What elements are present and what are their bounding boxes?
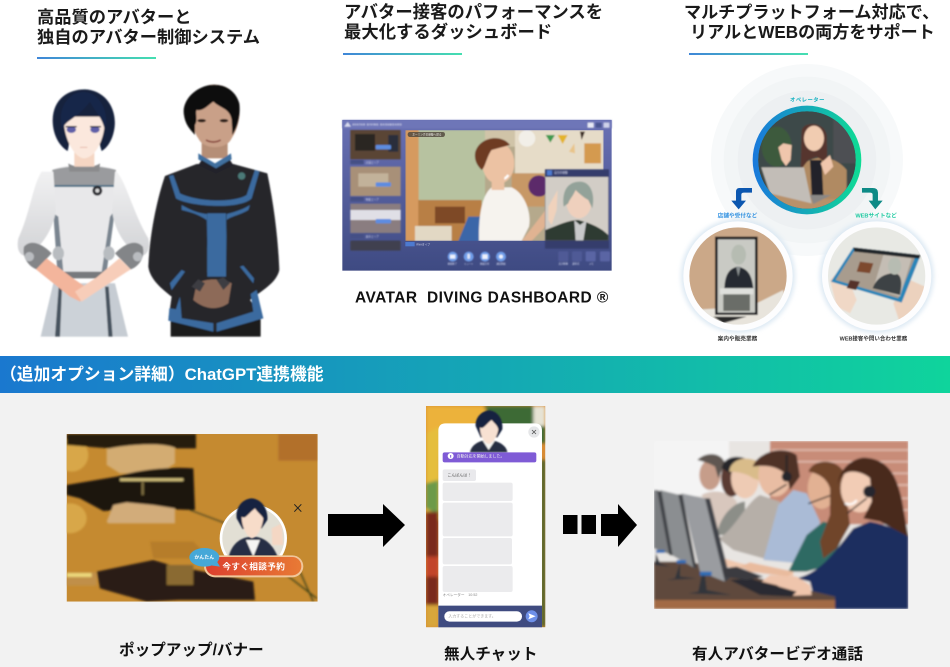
dashboard screenshot xyxy=(342,120,612,271)
dashboard screenshot: AVATAR DIVING DASHBOARD xyxy=(352,123,402,127)
label: web: WEBサイトなど xyxy=(855,212,897,220)
close icon xyxy=(294,504,301,512)
caption: staffed video call: 有人アバタービデオ通話 xyxy=(692,644,863,663)
dashboard screenshot: 画面共有 xyxy=(480,262,490,266)
illustration: realistic avatar xyxy=(148,85,279,337)
operator label: オペレーター xyxy=(790,95,825,103)
dashboard screenshot: 物販エリア xyxy=(366,198,379,202)
heading: dashboard: 最大化するダッシュボード xyxy=(344,22,552,42)
operators photo xyxy=(654,441,908,609)
chat bubbles xyxy=(443,469,513,597)
chat avatar xyxy=(470,410,507,452)
status bar xyxy=(443,452,536,462)
button: 今すぐ相談予約 xyxy=(222,561,285,572)
caption: unattended chat: 無人チャット xyxy=(444,645,537,663)
arrow: dashed xyxy=(563,504,637,547)
dashboard screenshot: 展示エリア xyxy=(366,235,379,239)
label: store: 店舗や受付など xyxy=(718,212,758,220)
chat panel: 入力することができます。 xyxy=(448,613,496,619)
web circle xyxy=(820,219,934,333)
chat panel xyxy=(438,423,542,627)
heading: dashboard: アバター接客のパフォーマンスを xyxy=(344,2,603,22)
band: option heading: （追加オプション詳細）ChatGPT連携機能 xyxy=(0,364,324,384)
dashboard screenshot: 出力映像 xyxy=(559,262,569,266)
bubble xyxy=(189,548,220,567)
concentric background circles xyxy=(711,64,903,256)
dashboard screenshot: ホーミングの映像へ戻る xyxy=(412,133,442,137)
dashboard screenshot: ミュート xyxy=(464,263,473,266)
status bar: 自動対応を開始しました。 xyxy=(457,453,504,459)
arrow: solid xyxy=(328,504,405,547)
heading: high quality avatars: 独自のアバター制御システム xyxy=(37,27,260,47)
caption: store: 案内や販売業務 xyxy=(718,334,758,342)
caption: popup banner: ポップアップ/バナー xyxy=(119,641,264,659)
heading: multi platform xyxy=(684,3,939,55)
caption: web: WEB接客や問い合わせ業務 xyxy=(840,334,908,342)
button xyxy=(204,555,303,577)
platform diagram xyxy=(681,64,934,342)
dashboard screenshot: RNAタイプ xyxy=(416,242,430,246)
chat bubbles: こんばんは！ xyxy=(447,472,471,478)
operator circle xyxy=(753,106,861,214)
popup banner example xyxy=(53,434,318,602)
chatbot example xyxy=(426,406,545,627)
dashboard screenshot: 接続終了 xyxy=(448,262,458,266)
store circle xyxy=(681,219,795,333)
bubble: かんたん xyxy=(194,554,214,561)
dashboard screenshot: 選択式 xyxy=(572,262,580,266)
arrow: to web xyxy=(862,188,883,209)
dashboard screenshot: メモ xyxy=(589,263,594,266)
dashboard screenshot: 店舗エリア xyxy=(366,161,379,165)
heading: high quality avatars: 高品質のアバターと xyxy=(37,7,192,27)
dashboard screenshot: 通話開始 xyxy=(496,262,506,266)
arrow: to store xyxy=(731,188,752,209)
dashboard screenshot: 自分の映像 xyxy=(554,171,568,175)
heading: high quality avatars xyxy=(37,7,260,59)
band: option heading xyxy=(0,356,950,393)
heading: multi platform: リアルとWEBの両方をサポート xyxy=(690,22,935,42)
page background: bottom section xyxy=(0,393,950,667)
caption: dashboard name: AVATAR DIVING DASHBOARD ® xyxy=(355,290,609,306)
heading: multi platform: マルチプラットフォーム対応で、 xyxy=(684,3,939,22)
avatar portrait xyxy=(220,497,287,556)
illustration: anime avatar xyxy=(18,89,149,337)
heading: dashboard xyxy=(343,2,603,55)
chat bubbles: オペレーター 10:52 xyxy=(443,592,477,597)
